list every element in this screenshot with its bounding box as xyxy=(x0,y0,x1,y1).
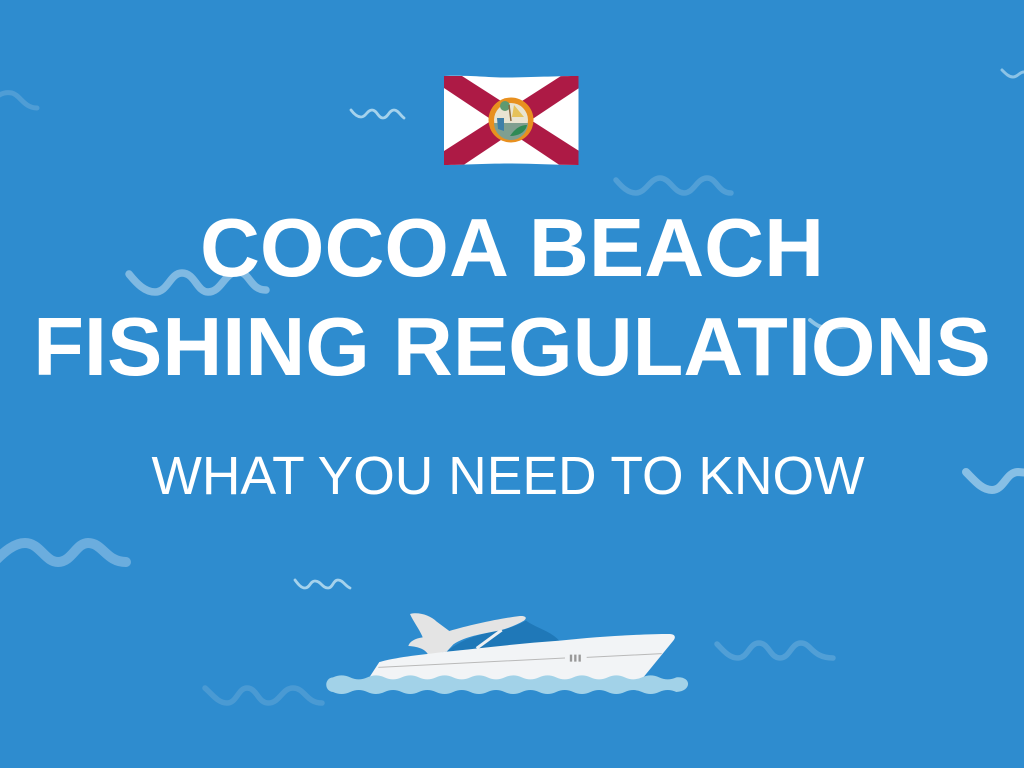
icon: Florida flag xyxy=(444,76,578,165)
wave: behind title right xyxy=(810,320,850,328)
icon: boat on water xyxy=(326,613,688,694)
hardtop arch xyxy=(408,613,526,655)
windscreen strut xyxy=(477,630,502,648)
wave: left large xyxy=(0,543,126,562)
wave: top left edge xyxy=(0,93,37,108)
icon: state seal xyxy=(488,98,534,142)
wave: small top centre xyxy=(351,110,404,118)
subtitle: WHAT YOU NEED TO KNOW xyxy=(152,447,864,506)
wave: small above boat xyxy=(295,580,350,588)
wave: top right corner xyxy=(1002,70,1024,77)
hull xyxy=(369,634,675,683)
title: FISHING REGULATIONS xyxy=(33,300,991,393)
vents xyxy=(571,655,580,662)
wave: bottom left xyxy=(205,688,322,703)
wave: behind title left xyxy=(129,272,266,292)
title xyxy=(33,201,991,393)
title: COCOA BEACH xyxy=(200,201,824,294)
hull stripe xyxy=(378,654,662,667)
wave: right edge xyxy=(966,472,1024,490)
wave: right of boat xyxy=(717,643,833,658)
water xyxy=(326,675,688,694)
windscreen xyxy=(447,621,559,652)
wave: under flag xyxy=(616,178,731,193)
